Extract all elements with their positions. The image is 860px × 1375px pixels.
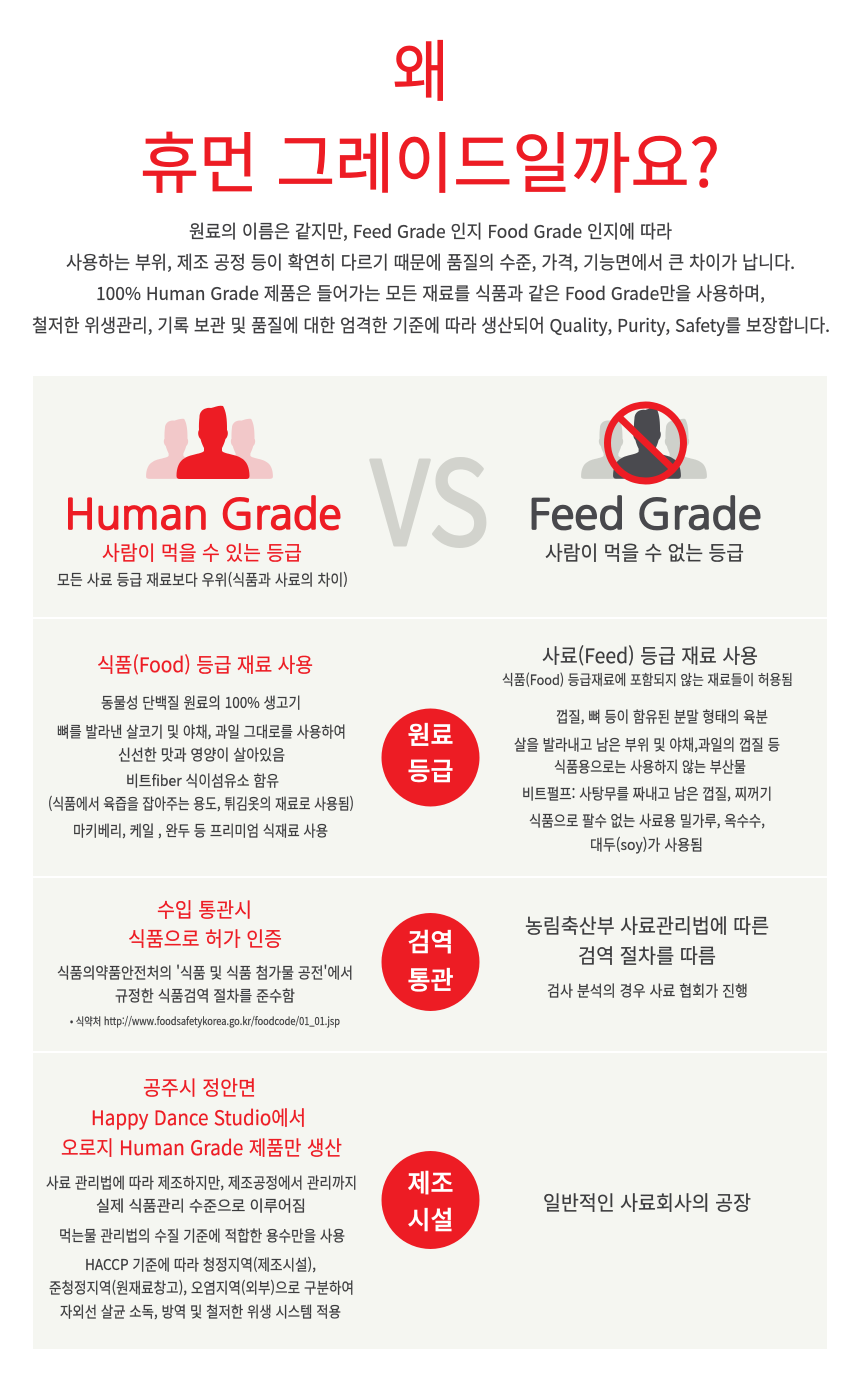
intro text: 100% Human Grade 제품은 들어가는 모든 재료를 식품과 같은 Food Grade만을 사용하며, <box>96 280 765 306</box>
left: manufacturing facility: 자외선 살균 소독, 방역 및 철저한 위생 시스템 적용 <box>60 1301 341 1322</box>
badge: raw material grade: 등급 <box>407 752 454 788</box>
badge: manufacturing facility: 제조 <box>407 1164 454 1200</box>
right: raw material grade: 대두(soy)가 사용됨 <box>590 834 703 855</box>
left: manufacturing facility: Happy Dance Studio에서 <box>91 1102 306 1131</box>
heading: feed grade: Feed Grade <box>528 493 762 535</box>
right: customs inspection: 검역 절차를 따름 <box>578 940 716 969</box>
right: customs inspection: 농림축산부 사료관리법에 따른 <box>525 910 769 939</box>
left: manufacturing facility: 먹는물 관리법의 수질 기준에 적합한 용수만을 사용 <box>59 1225 345 1246</box>
intro text: 사용하는 부위, 제조 공정 등이 확연히 다르기 때문에 품질의 수준, 가격, 기능면에서 큰 차이가 납니다. <box>66 249 795 275</box>
badge: customs inspection <box>382 913 480 1011</box>
badge: raw material grade <box>382 708 480 806</box>
left: raw material grade: (식품에서 육즙을 잡아주는 용도, 튀김옷의 재료로 사용됨) <box>48 793 354 814</box>
left: manufacturing facility: 사료 관리법에 따라 제조하지만, 제조공정에서 관리까지 <box>46 1172 357 1193</box>
right: raw material grade: 껍질, 뼈 등이 함유된 분말 형태의 육분 <box>556 706 768 727</box>
heading: human grade: 모든 사료 등급 재료보다 우위(식품과 사료의 차이) <box>57 569 348 590</box>
heading: feed grade <box>528 493 762 566</box>
title: 왜 <box>392 19 450 115</box>
intro text: 원료의 이름은 같지만, Feed Grade 인지 Food Grade 인지에 따라 <box>189 218 672 244</box>
right: customs inspection: 검사 분석의 경우 사료 협회가 진행 <box>547 980 748 1001</box>
heading: feed grade: 사람이 먹을 수 없는 등급 <box>545 537 744 566</box>
heading: human grade: 사람이 먹을 수 있는 등급 <box>102 537 302 566</box>
heading: human grade <box>57 493 348 590</box>
left: raw material grade: 뼈를 발라낸 살코기 및 야채, 과일 그대로를 사용하여 <box>57 721 346 742</box>
left: customs inspection: • 식약처 http://www.foodsafetykorea.go.kr/foodcode/01_01.jsp <box>70 1014 340 1029</box>
left: raw material grade: 마키베리, 케일 , 완두 등 프리미엄 식재료 사용 <box>73 820 328 841</box>
right: raw material grade <box>502 640 793 855</box>
left: raw material grade: 신선한 맛과 영양이 살아있음 <box>118 744 285 765</box>
right: raw material grade: 비트펄프: 사탕무를 짜내고 남은 껍질, 찌꺼기 <box>522 783 772 804</box>
right: raw material grade: 살을 발라내고 남은 부위 및 야채,과일의 껍질 등 <box>514 734 780 755</box>
right: manufacturing facility: 일반적인 사료회사의 공장 <box>543 1187 751 1216</box>
badge: raw material grade: 원료 <box>407 716 454 752</box>
left: manufacturing facility <box>46 1072 357 1322</box>
left: raw material grade: 비트fiber 식이섬유소 함유 <box>126 770 279 791</box>
left: customs inspection: 식품으로 허가 인증 <box>128 923 282 952</box>
vs mark: VS <box>370 411 490 579</box>
icon: human grade people <box>146 406 273 479</box>
left: raw material grade: 동물성 단백질 원료의 100% 생고기 <box>101 692 301 713</box>
left: customs inspection: 규정한 식품검역 절차를 준수함 <box>115 985 295 1006</box>
title: 휴먼 그레이드일까요? <box>140 111 720 207</box>
left: raw material grade <box>48 649 354 841</box>
left: raw material grade: 식품(Food) 등급 재료 사용 <box>97 649 313 678</box>
title <box>140 19 720 207</box>
left: customs inspection: 수입 통관시 <box>157 894 252 923</box>
badge: manufacturing facility: 시설 <box>407 1201 454 1237</box>
right: raw material grade: 식품(Food) 등급재료에 포함되지 않는 재료들이 허용됨 <box>502 670 793 690</box>
left: manufacturing facility: 실제 식품관리 수준으로 이루어짐 <box>96 1195 306 1216</box>
left: customs inspection <box>57 894 353 1029</box>
left: manufacturing facility: 준청정지역(원재료창고), 오염지역(외부)으로 구분하여 <box>49 1277 354 1298</box>
badge: manufacturing facility <box>382 1151 480 1249</box>
badge: customs inspection: 통관 <box>407 961 454 997</box>
intro text <box>32 218 830 338</box>
left: manufacturing facility: 공주시 정안면 <box>143 1072 256 1101</box>
right: raw material grade: 식품용으로는 사용하지 않는 부산물 <box>554 756 746 777</box>
intro text: 철저한 위생관리, 기록 보관 및 품질에 대한 엄격한 기준에 따라 생산되어 Quality, Purity, Safety를 보장합니다. <box>32 312 830 338</box>
left: customs inspection: 식품의약품안전처의 '식품 및 식품 첨가물 공전'에서 <box>57 962 353 983</box>
badge: customs inspection: 검역 <box>407 923 454 959</box>
left: manufacturing facility: 오로지 Human Grade 제품만 생산 <box>61 1132 342 1161</box>
right: raw material grade: 사료(Feed) 등급 재료 사용 <box>542 640 758 669</box>
heading: human grade: Human Grade <box>64 493 342 535</box>
left: manufacturing facility: HACCP 기준에 따라 청정지역(제조시설), <box>85 1254 316 1275</box>
icon: feed grade prohibited people <box>581 405 707 481</box>
right: raw material grade: 식품으로 팔수 없는 사료용 밀가루, 옥수수, <box>529 810 765 831</box>
right: customs inspection <box>525 910 769 1001</box>
panel: comparison background <box>33 376 827 1349</box>
